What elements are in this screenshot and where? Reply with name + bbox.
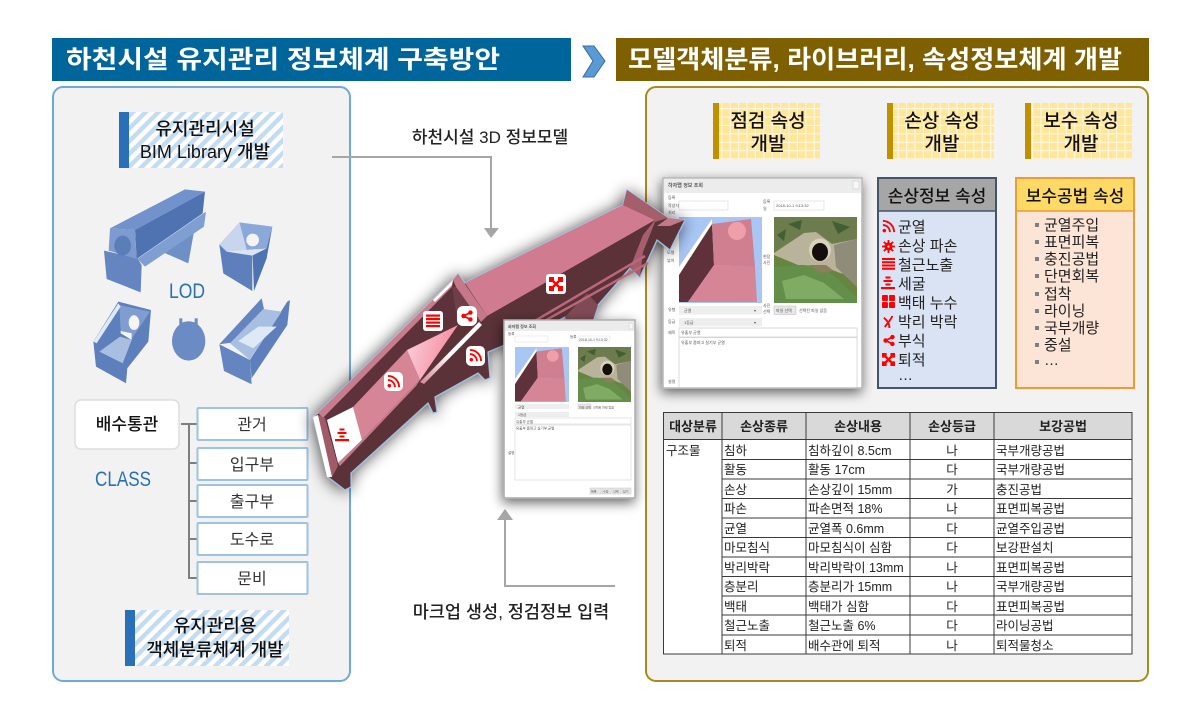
class item list: 관거	[237, 416, 267, 434]
dialog: inspection form large: 선택된 파일 없음	[799, 307, 827, 313]
table: damage and repair: 보강판설치	[996, 541, 1054, 555]
label: CLASS: CLASS	[95, 468, 151, 491]
model: manhole cover	[172, 318, 205, 361]
box: repair methods	[1016, 178, 1134, 388]
heading: classification: 객체분류체계 개발	[146, 640, 284, 660]
model: outlet box	[93, 302, 151, 383]
class item list	[198, 408, 308, 594]
table: damage and repair: 다	[946, 541, 958, 555]
dialog: inspection form small	[504, 320, 635, 498]
label: LOD: LOD	[169, 280, 205, 303]
table: damage and repair: 표면피복공법	[996, 561, 1065, 575]
table: damage and repair: 침하깊이 8.5cm	[808, 444, 892, 458]
end plate	[318, 415, 338, 477]
dialog: inspection form small: 수정	[603, 488, 609, 494]
rails	[505, 256, 648, 343]
table: damage and repair: 라이닝공법	[996, 619, 1054, 633]
box: repair methods: 충진공법	[1044, 251, 1099, 268]
dialog: inspection form small: 등록	[570, 334, 577, 339]
table: damage and repair: 다	[946, 600, 958, 614]
table: damage and repair: 침하	[724, 444, 748, 458]
box: damage attributes: 부식	[898, 333, 926, 350]
dialog: inspection form large: 제목	[668, 329, 676, 335]
marker: scour	[335, 428, 349, 441]
dialog: inspection form large: 현장	[763, 253, 771, 259]
box: repair methods: 단면회복	[1044, 268, 1099, 285]
box: damage attributes: 손상 파손	[898, 238, 958, 255]
table: damage and repair: 철근노출 6%	[808, 619, 876, 633]
panel: facility library and classification	[53, 87, 350, 681]
table: damage and repair: 국부개량공법	[996, 463, 1065, 477]
table: damage and repair: 퇴적물청소	[996, 639, 1054, 653]
icon: exposed rebar	[882, 258, 895, 270]
table: damage and repair: 퇴적	[724, 639, 747, 653]
table: damage and repair: 파손면적 18%	[808, 502, 882, 516]
table: damage and repair: 나	[946, 561, 958, 575]
model: channel	[219, 298, 290, 384]
marker: rebar	[423, 311, 443, 331]
support block	[565, 293, 598, 330]
box: repair methods: 국부개량	[1044, 320, 1099, 337]
marker: sediment	[546, 274, 566, 294]
title bar: right: 모델객체분류, 라이브러리, 속성정보체계 개발	[628, 46, 1122, 74]
icon: efflorescence	[882, 295, 895, 308]
table: damage and repair: 박리박락이 13mm	[808, 561, 904, 575]
table: damage and repair: 다	[946, 463, 958, 477]
arrow: form back to model	[497, 509, 615, 586]
icon: scour	[881, 276, 895, 289]
table: damage and repair: 충진공법	[996, 483, 1042, 497]
box: repair methods: 라이닝	[1044, 303, 1085, 320]
table: damage and repair: 보강공법	[1039, 419, 1087, 434]
table: damage and repair: 백태가 심함	[808, 600, 869, 614]
box: damage attributes: …	[898, 367, 913, 384]
dialog: inspection form large: ▾	[754, 308, 756, 313]
table: damage and repair: 손상깊이 15mm	[808, 483, 892, 497]
table: damage and repair: 나	[946, 639, 958, 653]
dialog: inspection form small: 2018-10-1 9:13:32	[579, 338, 608, 342]
title bar: left: 하천시설 유지관리 정보체계 구축방안	[66, 46, 500, 74]
dialog: inspection form small: 삭제	[613, 488, 619, 494]
heading: BIM library: BIM Library 개발	[140, 142, 270, 162]
lower rim	[420, 322, 482, 384]
table: damage and repair: 국부개량공법	[996, 580, 1065, 594]
table: damage and repair: 나	[946, 502, 958, 516]
table: damage and repair: 층분리	[724, 580, 759, 594]
table: damage and repair: 파손	[724, 502, 747, 516]
table: damage and repair: 균열	[724, 522, 747, 536]
icon: breakage	[882, 240, 895, 253]
box: repair methods: 표면피복	[1044, 234, 1099, 251]
table: damage and repair: 철근노출	[724, 619, 770, 633]
dialog: inspection form large	[663, 178, 862, 388]
dialog: inspection form small: 닫기	[623, 488, 629, 494]
table: damage and repair: 손상내용	[834, 419, 882, 434]
table: damage and repair: 가	[946, 483, 958, 497]
table: damage and repair: 층분리가 15mm	[808, 580, 892, 594]
table: damage and repair: 국부개량공법	[996, 444, 1065, 458]
dialog: inspection form large: 유출부 좁파고 실기부 균열	[681, 339, 725, 345]
arrow: library to model	[332, 157, 499, 238]
end flange	[623, 190, 668, 277]
heading: inspection attributes: 점검 속성	[730, 110, 806, 132]
box: repair methods: 보수공법 속성	[1026, 187, 1124, 206]
icon: chevron arrow	[583, 46, 605, 77]
3D river facility pipe model	[313, 190, 685, 490]
box: damage attributes: 퇴적	[898, 352, 926, 369]
dialog: inspection form large: 2018-10-1 9:13:32	[776, 203, 809, 208]
class item list: 입구부	[230, 456, 274, 474]
table: damage and repair: 표면피복공법	[996, 502, 1065, 516]
title bar: right	[616, 38, 1149, 81]
dialog: inspection form large: 사진	[763, 259, 771, 265]
table: damage and repair: 균열폭 0.6mm	[808, 522, 884, 536]
class item list: 문비	[237, 570, 267, 588]
box: repair methods: 접착	[1044, 286, 1072, 303]
model: culvert barrel	[104, 189, 206, 292]
table: damage and repair: 나	[946, 580, 958, 594]
table: damage and repair: 활동 17cm	[808, 463, 865, 477]
heading: inspection attributes: 개발	[751, 133, 785, 155]
pipe silhouette with shadow	[313, 190, 685, 490]
label: markup and inspection input: 마크업 생성, 정검정보 입력	[413, 602, 609, 622]
dialog: inspection form large: 작성자	[668, 202, 679, 208]
table: damage and repair: 손상등급	[928, 419, 976, 434]
table: damage and repair: 마모침식이 심함	[808, 541, 892, 555]
heading: damage attributes	[887, 103, 994, 159]
heading: classification	[125, 610, 289, 666]
icon: crack	[883, 221, 894, 232]
dialog: inspection form large: 사진	[763, 302, 771, 308]
heading: BIM library: 유지관리시설	[155, 119, 255, 139]
dialog: inspection form large: 선택	[763, 308, 771, 314]
dialog: inspection form large: 균열	[684, 307, 692, 313]
dialog: inspection form large: ▾	[754, 320, 756, 325]
dialog: inspection form large: 처리	[668, 209, 676, 215]
dialog: inspection form small: 설명	[508, 450, 514, 455]
inner wall	[323, 287, 458, 420]
box: damage attributes	[878, 178, 996, 388]
box: damage attributes: 손상정보 속성	[888, 187, 986, 206]
table: damage and repair: 배수관에 퇴적	[808, 639, 880, 653]
table: damage and repair: 다	[946, 522, 958, 536]
table: damage and repair: 마모침식	[724, 541, 770, 555]
table: damage and repair: 손상종류	[740, 419, 788, 434]
dialog: inspection form small: 등록	[508, 331, 515, 336]
dialog: inspection form small: 목록	[591, 488, 597, 494]
box: repair methods: …	[1044, 352, 1059, 369]
dialog: inspection form large: 뷰어	[667, 257, 675, 263]
channel floor	[353, 350, 420, 440]
heading: BIM library	[119, 112, 283, 168]
dialog: inspection form large: 일	[763, 205, 767, 211]
heading: damage attributes: 개발	[925, 133, 959, 155]
panel: attribute development	[646, 87, 1148, 681]
heading: repair attributes	[1025, 103, 1132, 159]
LOD component models	[93, 189, 290, 384]
marker: corrosion	[457, 306, 477, 326]
box: damage attributes: 백태 누수	[898, 295, 957, 312]
white patch	[327, 407, 362, 463]
table: damage and repair: 나	[946, 444, 958, 458]
dialog: inspection form small: 1등급	[518, 413, 527, 417]
table: damage and repair: 백태	[724, 600, 747, 614]
dialog: inspection form small: 하자맵 정보 조회	[508, 323, 536, 329]
dialog: inspection form large: 1등급	[684, 320, 694, 325]
dialog: inspection form small: 선택된 파일 없음	[593, 404, 614, 410]
class item list: 도수로	[230, 531, 274, 549]
title bar: left	[52, 38, 571, 81]
class item list: 출구부	[230, 493, 274, 511]
heading: classification: 유지관리용	[174, 616, 256, 636]
dialog: inspection form large: 하자맵 정보 조회	[668, 182, 703, 189]
class box: drainage culvert: 배수통관	[96, 415, 159, 434]
table: damage and repair: 손상	[724, 483, 748, 497]
dialog: inspection form small: 유출부 좁파고 실기부 균열	[516, 426, 554, 430]
dialog: inspection form large: 등록	[763, 198, 771, 204]
barrel top face	[465, 205, 655, 316]
box: damage attributes: 세굴	[898, 276, 926, 293]
dialog: inspection form large: 모델	[667, 249, 675, 255]
box: repair methods: 중설	[1044, 337, 1072, 354]
table: damage and repair: 구조물	[666, 444, 701, 458]
dialog: inspection form small: 균열	[518, 404, 524, 410]
class box: drainage culvert	[75, 400, 179, 449]
table: damage and repair	[663, 412, 1132, 654]
heading: inspection attributes	[713, 103, 820, 159]
box: damage attributes: 철근노출	[898, 257, 953, 274]
dialog: inspection form large: 파일 선택	[776, 307, 792, 313]
heading: repair attributes: 보수 속성	[1043, 110, 1119, 132]
box: damage attributes: 균열	[898, 219, 926, 236]
dialog: inspection form large: 설명	[668, 378, 676, 384]
channel upper rim	[318, 280, 453, 418]
heading: damage attributes: 손상 속성	[904, 110, 980, 132]
icon: spalling	[884, 316, 892, 328]
middle flange	[453, 274, 487, 322]
model: inlet box	[219, 222, 272, 291]
icon: corrosion	[883, 335, 895, 346]
box: repair methods: 균열주입	[1044, 217, 1099, 234]
dialog: inspection form small: 파일 선택	[579, 404, 591, 410]
table: damage and repair: 대상분류	[669, 419, 717, 434]
dialog: inspection form small: 유출부 균열	[516, 419, 533, 424]
ramp	[407, 325, 458, 380]
heading: repair attributes: 개발	[1064, 133, 1098, 155]
marker: crack right	[466, 346, 485, 366]
icon: sediment	[882, 353, 895, 366]
dialog: inspection form large: 등급	[668, 319, 676, 324]
dialog: inspection form large: 유출부 균열	[681, 329, 701, 335]
label: river facility 3D model: 하천시설 3D 정보모델	[412, 128, 568, 147]
table: damage and repair: 균열주입공법	[996, 522, 1065, 536]
table: damage and repair: 박리박락	[724, 561, 771, 575]
dialog: inspection form large: 등록	[668, 194, 676, 200]
table: damage and repair: 활동	[724, 463, 747, 477]
dialog: inspection form large: 유형	[668, 306, 676, 312]
marker: crack floor	[384, 372, 403, 391]
table: damage and repair: 표면피복공법	[996, 600, 1065, 614]
table: damage and repair: 다	[946, 619, 958, 633]
box: damage attributes: 박리 박락	[898, 314, 958, 331]
